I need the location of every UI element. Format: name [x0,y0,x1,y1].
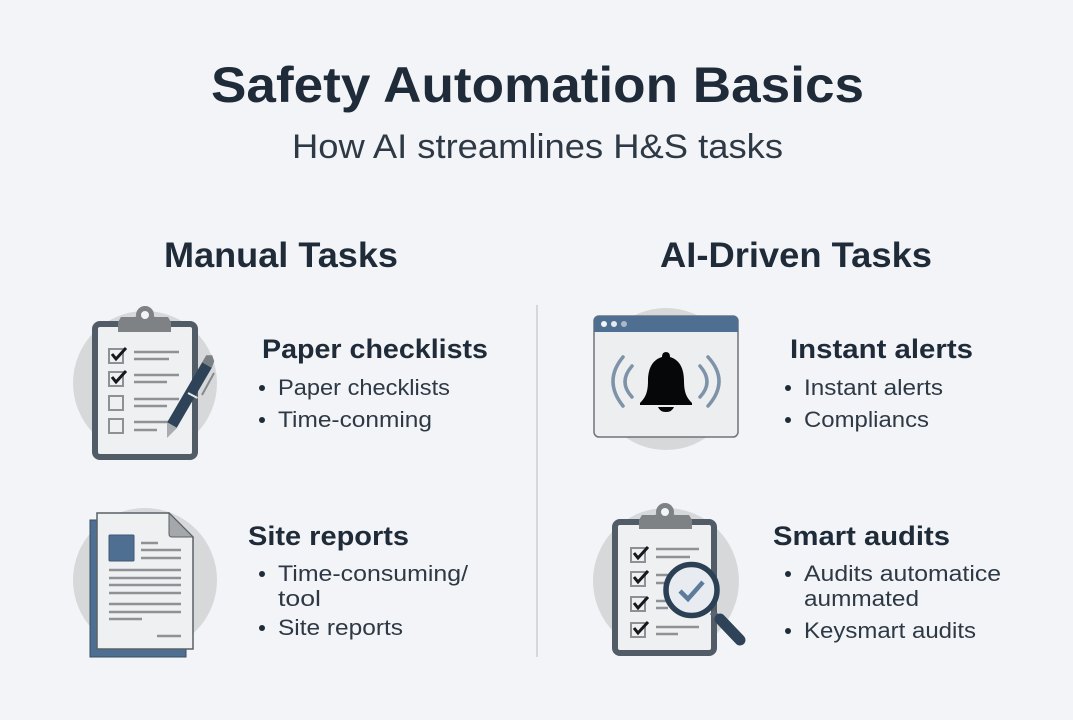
bullet list: Site reports [278,615,403,640]
heading: manual tasks: Manual Tasks [164,236,398,275]
icon: browser window with bell [594,308,738,450]
bullet list: Compliancs [804,407,929,432]
bullet list [785,561,1001,643]
bullet list: Keysmart audits [804,618,976,643]
bullet list: Audits automatice [804,561,1001,586]
bullet list: tool [278,586,321,611]
bullet list [785,375,943,432]
heading: instant alerts: Instant alerts [790,334,973,364]
panel: instant alerts [594,308,973,450]
panel: smart audits [593,506,1001,654]
subtitle: How AI streamlines H&S tasks [292,128,783,166]
heading: paper checklists: Paper checklists [262,334,488,364]
bullet list [259,375,450,432]
heading: AI-driven tasks: AI-Driven Tasks [660,236,932,275]
icon: clipboard with pen [73,308,217,457]
heading: smart audits: Smart audits [773,521,950,551]
bullet list: Instant alerts [804,375,943,400]
panel: paper checklists [73,308,488,457]
icon: clipboard with magnifier [593,506,740,654]
bullet list: aummated [804,586,919,611]
bullet list: Paper checklists [278,375,450,400]
bullet list: Time-conming [278,407,432,432]
panel: site reports [73,508,469,657]
bullet list [259,561,469,640]
bullet list: Time-consuming/ [278,561,469,586]
icon: document [73,508,217,657]
heading: site reports: Site reports [248,521,409,551]
title: Safety Automation Basics [211,57,864,113]
